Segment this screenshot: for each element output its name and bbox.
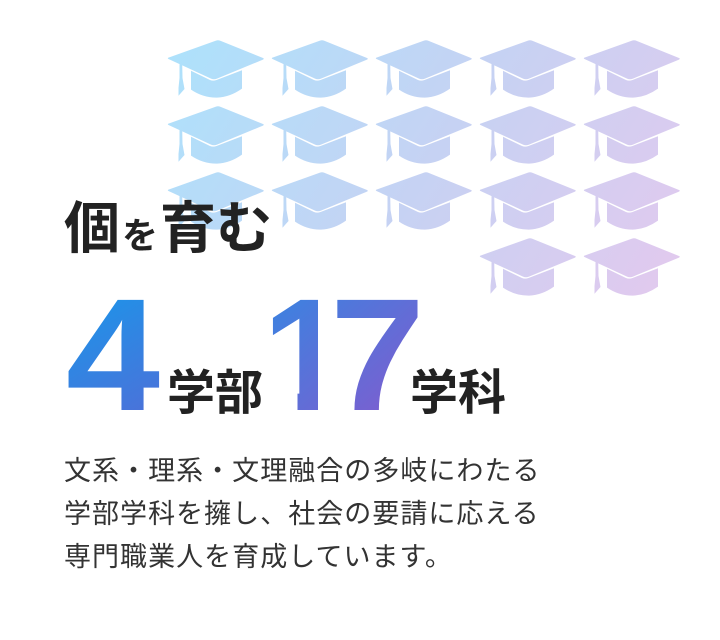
cap r1c2: [272, 40, 368, 98]
cap r1c1: [168, 40, 264, 98]
cap r1c4: [480, 40, 576, 98]
digit 1: 1: [262, 265, 351, 444]
description text: [64, 456, 541, 572]
digit 7: 7: [330, 265, 425, 444]
unit: 学部: 学部: [167, 367, 263, 420]
heading: 個を育む: [64, 197, 272, 260]
cap r1c5: [584, 40, 680, 98]
cap r3c2: [272, 172, 368, 230]
cap r2c2: [272, 106, 368, 164]
cap r4c4: [480, 238, 576, 296]
cap r3c3: [376, 172, 472, 230]
cap r3c4: [480, 172, 576, 230]
description text: 学部学科を擁し、社会の要請に応える: [64, 499, 540, 529]
cap r3c5: [584, 172, 680, 230]
number 4: 4: [66, 265, 160, 444]
cap r2c5: [584, 106, 680, 164]
cap r2c1: [168, 106, 264, 164]
cap r4c5: [584, 238, 680, 296]
big numbers: [68, 300, 418, 410]
cap r2c4: [480, 106, 576, 164]
description text: 専門職業人を育成しています。: [64, 542, 453, 572]
description text: 文系・理系・文理融合の多岐にわたる: [64, 456, 541, 486]
number 17: [272, 300, 418, 410]
cap r2c3: [376, 106, 472, 164]
cap r1c3: [376, 40, 472, 98]
cap r3c1: [168, 172, 264, 230]
unit: 学科: 学科: [410, 367, 506, 420]
